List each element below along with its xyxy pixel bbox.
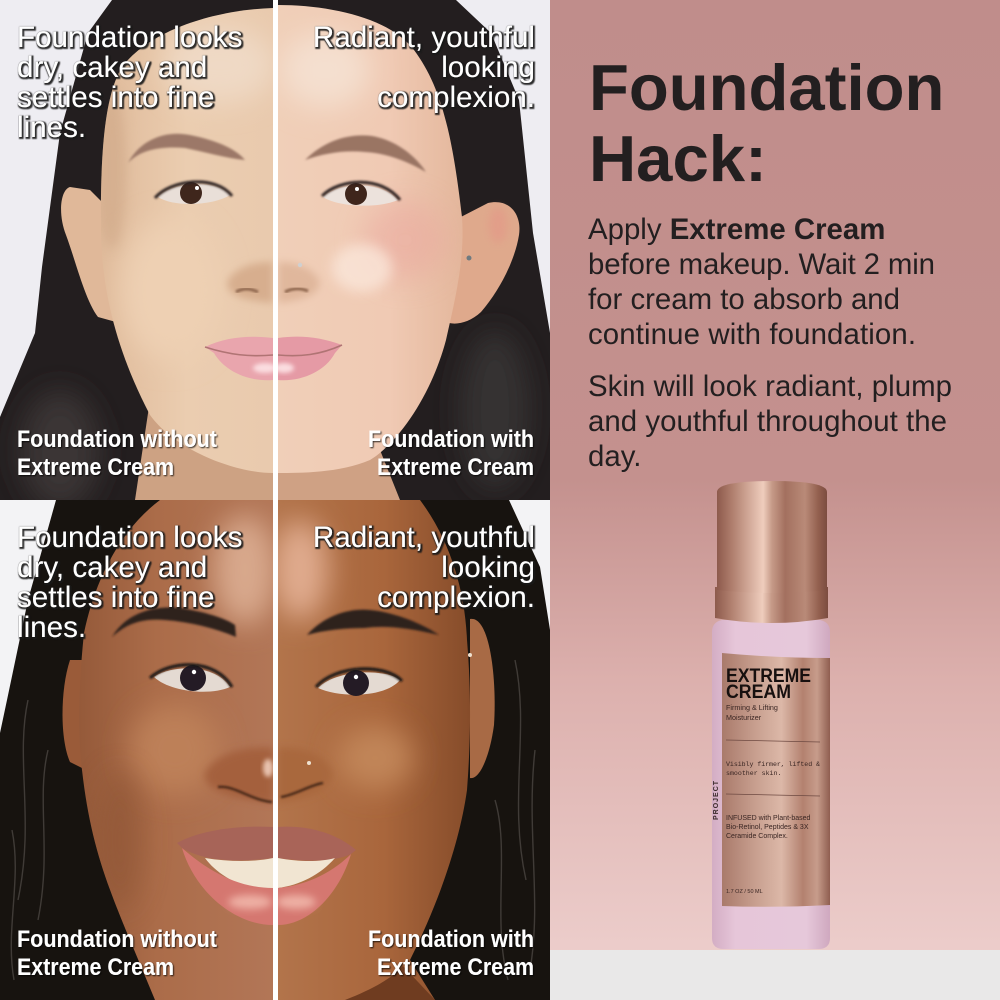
- label volume: 1.7 OZ / 50 ML: [726, 889, 763, 895]
- title: Foundation: [589, 51, 944, 124]
- label: bottom before claim: [17, 521, 242, 644]
- bottle collar: [715, 587, 828, 623]
- label: bottom before claim: lines.: [17, 611, 86, 644]
- label: top after claim: Radiant, youthful: [313, 21, 535, 54]
- face: without cream, bottom: [62, 500, 277, 1000]
- label: bottom after claim: complexion.: [377, 581, 535, 614]
- text block: instructions: for cream to absorb and: [588, 283, 900, 316]
- label: bottom after claim: looking: [441, 551, 535, 584]
- caption: top with cream: [368, 426, 534, 481]
- label: top after claim: [313, 21, 535, 114]
- label claim: [726, 761, 820, 777]
- label: bottom after claim: Radiant, youthful: [313, 521, 535, 554]
- label: top before claim: settles into fine: [17, 81, 214, 114]
- face: with cream, top: [274, 5, 519, 500]
- face: without cream, top: [61, 8, 277, 500]
- label ingredients: INFUSED with Plant-based: [726, 815, 811, 822]
- label: top after claim: complexion.: [377, 81, 535, 114]
- label descriptor: [726, 703, 778, 722]
- label claim: Visibly firmer, lifted &: [726, 761, 820, 768]
- title: Hack:: [589, 122, 767, 195]
- product: Extreme Cream bottle: [712, 481, 830, 949]
- vertical brand text: PROJECT: [713, 780, 720, 820]
- label: bottom after claim: [313, 521, 535, 614]
- caption: bottom without cream: Extreme Cream: [17, 954, 174, 981]
- label ingredients: [726, 815, 811, 840]
- label: top before claim: Foundation looks: [17, 21, 242, 54]
- hair: top model: [0, 0, 550, 510]
- text block: results: day.: [588, 440, 641, 473]
- panel: bottom comparison photo: [0, 500, 550, 1000]
- caption: bottom without cream: Foundation without: [17, 926, 217, 953]
- label: top before claim: [17, 21, 242, 144]
- text block: instructions: continue with foundation.: [588, 318, 916, 351]
- label: bottom before claim: dry, cakey and: [17, 551, 207, 584]
- caption: top without cream: Foundation without: [17, 426, 217, 453]
- text block: instructions: Apply Extreme Cream: [588, 213, 885, 246]
- caption: top without cream: Extreme Cream: [17, 454, 174, 481]
- label ingredients: Bio-Retinol, Peptides & 3X: [726, 824, 809, 831]
- face: with cream, bottom: [272, 500, 495, 1000]
- panel: top comparison photo: [0, 0, 550, 510]
- bottle label: [722, 653, 830, 907]
- label descriptor: Firming & Lifting: [726, 703, 778, 712]
- label: top before claim: dry, cakey and: [17, 51, 207, 84]
- dividers: white centre line: [273, 0, 278, 1000]
- label: top after claim: looking: [441, 51, 535, 84]
- caption: top without cream: [17, 426, 217, 481]
- label ingredients: Ceramide Complex.: [726, 833, 788, 840]
- panel: right background: [550, 0, 1000, 1000]
- caption: bottom with cream: Foundation with: [368, 926, 534, 953]
- label product name: EXTREME: [726, 666, 811, 687]
- bottle cap: [717, 481, 827, 593]
- caption: top with cream: Foundation with: [368, 426, 534, 453]
- title: [589, 51, 944, 195]
- caption: bottom with cream: Extreme Cream: [377, 954, 534, 981]
- hair: bottom model: [0, 500, 550, 1000]
- label: bottom before claim: settles into fine: [17, 581, 214, 614]
- label product name: CREAM: [726, 682, 791, 703]
- bottle body: [712, 620, 830, 949]
- label product name: [726, 666, 811, 703]
- label claim: smoother skin.: [726, 770, 781, 777]
- label: top before claim: lines.: [17, 111, 86, 144]
- text block: results: and youthful throughout the: [588, 405, 947, 438]
- text block: instructions: before makeup. Wait 2 min: [588, 248, 935, 281]
- caption: bottom without cream: [17, 926, 217, 981]
- label descriptor: Moisturizer: [726, 713, 762, 722]
- text block: results: [588, 370, 952, 473]
- text block: instructions: [588, 213, 935, 351]
- text block: results: Skin will look radiant, plump: [588, 370, 952, 403]
- caption: bottom with cream: [368, 926, 534, 981]
- shelf: [550, 950, 1000, 1000]
- label: bottom before claim: Foundation looks: [17, 521, 242, 554]
- caption: top with cream: Extreme Cream: [377, 454, 534, 481]
